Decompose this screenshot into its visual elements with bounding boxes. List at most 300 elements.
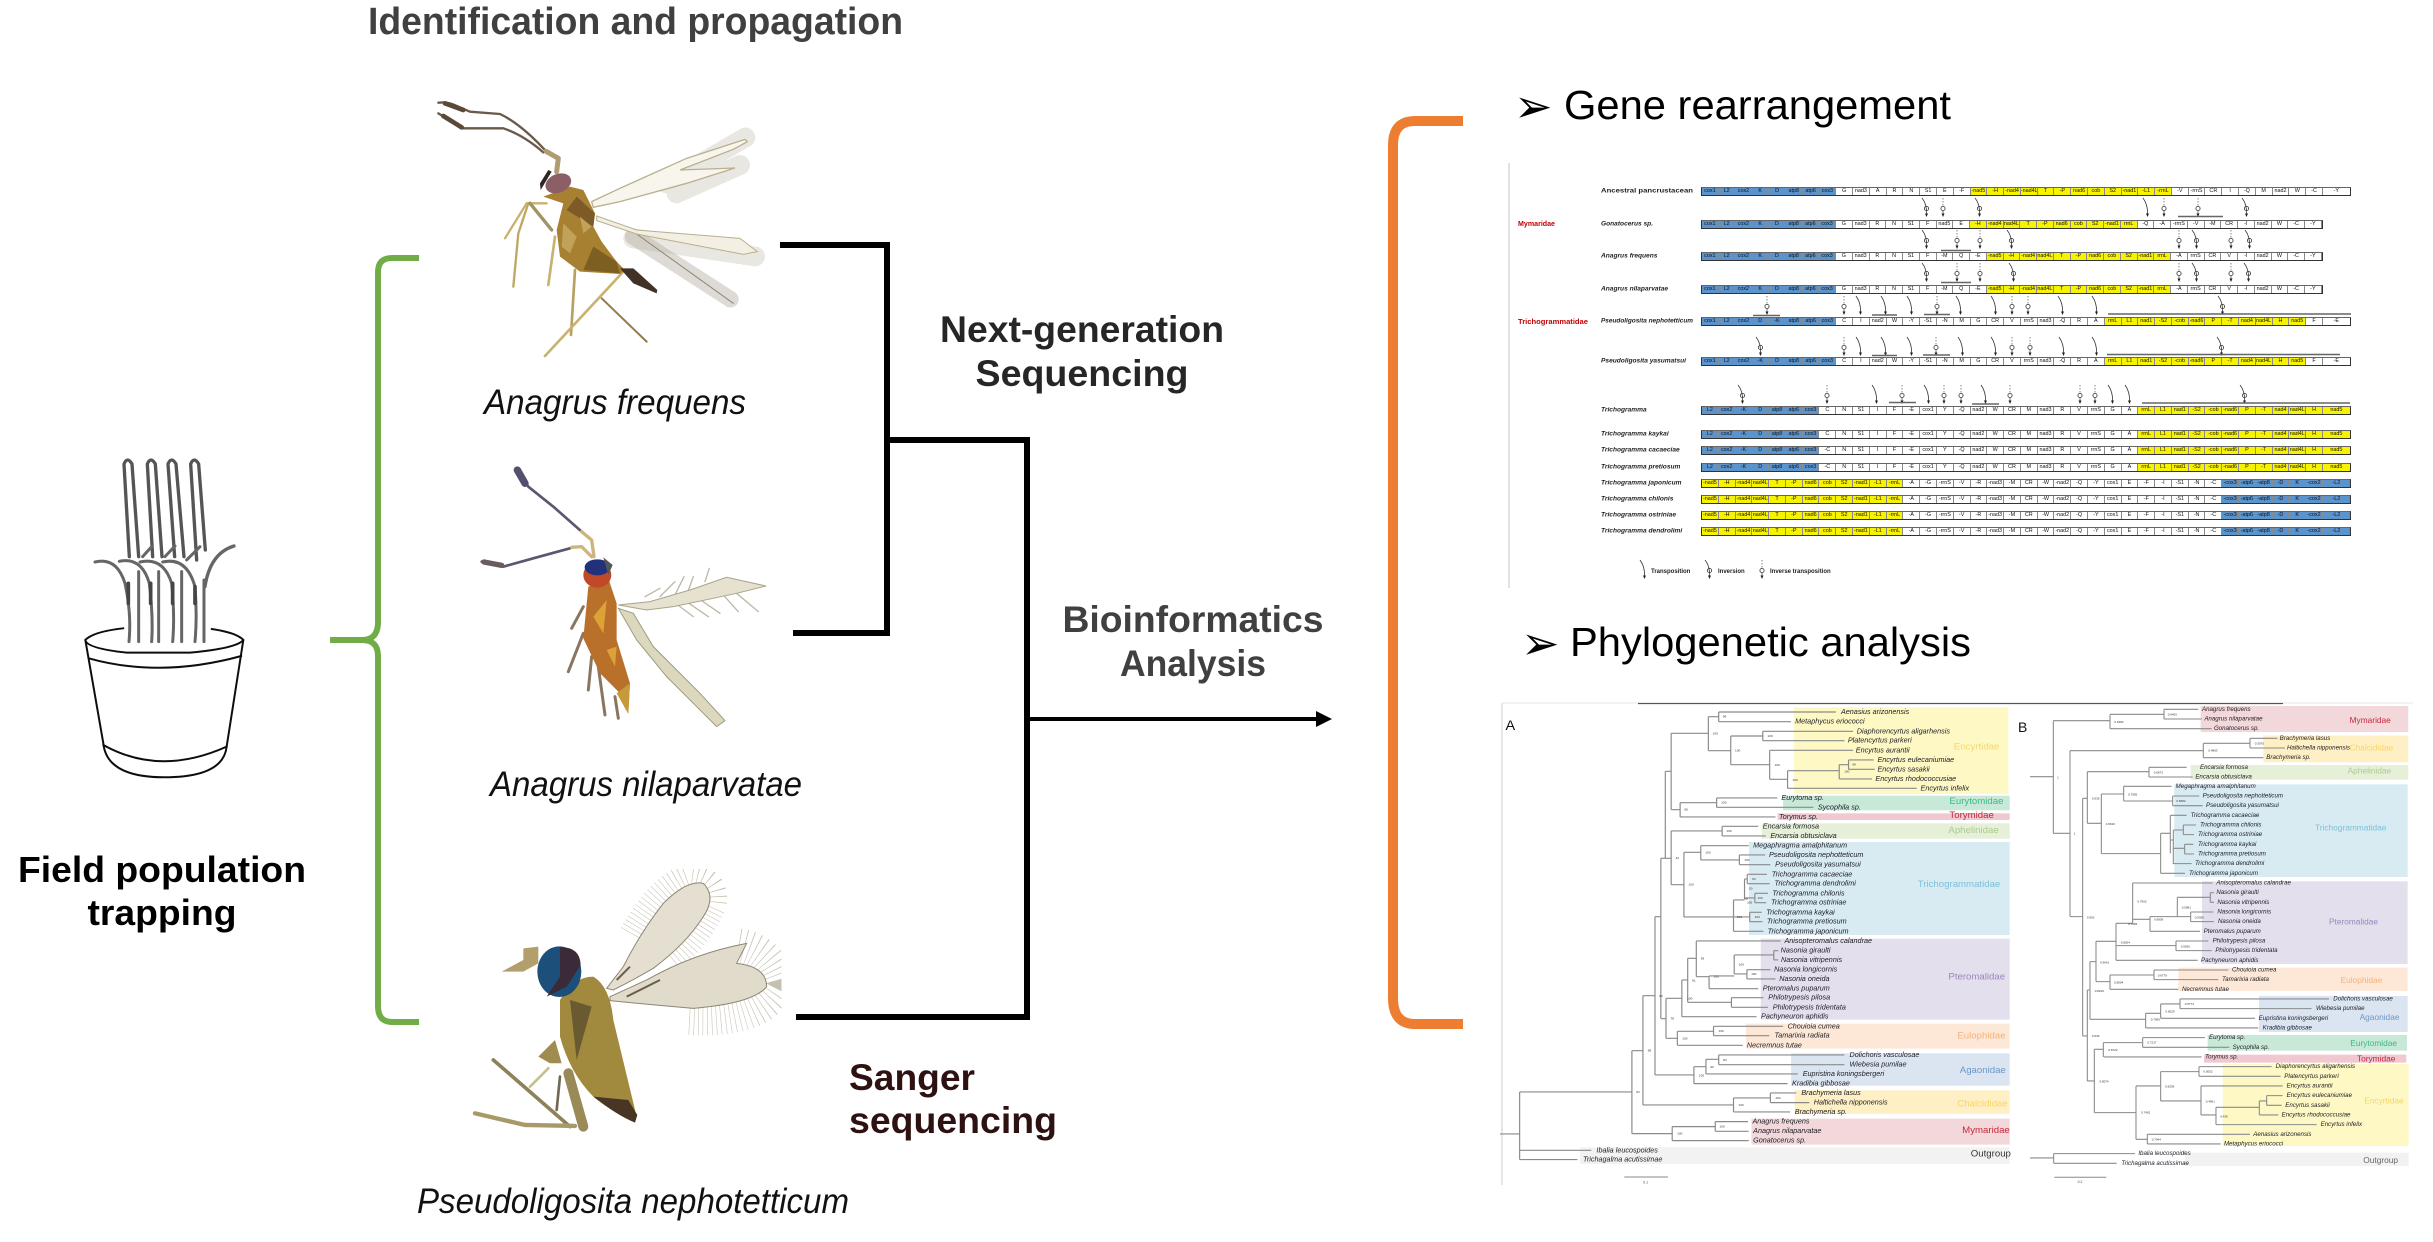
gene row: Trichogramma kaykai: L1 <box>2160 431 2166 437</box>
gene chart family labels <box>1518 221 1588 326</box>
gene row: Pseudoligosita nephotetticum: -N <box>1942 318 1948 324</box>
gene row: Trichogramma kaykai: rrnL <box>2141 431 2151 437</box>
gene row: Trichogramma japonicum: -Y <box>2093 480 2099 486</box>
gene row: Anagrus frequens: nad2 <box>2257 253 2269 259</box>
green bracket <box>330 258 419 1022</box>
node support values A: 99 <box>1852 762 1856 766</box>
gene row: Trichogramma chilonis: -cox3 <box>2224 496 2237 502</box>
species labels A: Pseudoligosita nephotteticum <box>1769 851 1863 859</box>
gene chart species labels: Trichogramma cacaeciae <box>1601 446 1680 454</box>
gene row: ancestral pancrustacean: I <box>2229 188 2231 194</box>
gene row: Trichogramma kaykai: nad4 <box>2274 431 2286 437</box>
gene row: Gonatocerus sp.: K <box>1758 221 1762 227</box>
gene row: Trichogramma cacaeciae: -S2 <box>2192 447 2201 453</box>
gene row: Trichogramma kaykai: nad4L <box>2290 431 2305 437</box>
family labels A: Torymidae <box>1949 810 1994 821</box>
node support values B: 0.7044 <box>2152 1137 2161 1141</box>
gene row: Pseudoligosita yasumatsui: -E <box>2334 358 2339 364</box>
gene row: Trichogramma pretiosum: rrnL <box>2141 464 2151 470</box>
gene row: Trichogramma dendrolimi: -cox3 <box>2224 528 2237 534</box>
gene row: Trichogramma dendrolimi: -N <box>2194 528 2199 534</box>
species labels B: Philotrypesis pilosa <box>2213 937 2266 944</box>
gene row: Trichogramma chilonis: -N <box>2194 496 2199 502</box>
species labels A: Chouioia cumea <box>1788 1022 1840 1030</box>
species labels B: Necremnus tutae <box>2182 986 2229 993</box>
gene row: ancestral pancrustacean: -nad4L <box>2021 188 2038 194</box>
gene row: Pseudoligosita nephotetticum: rrnS <box>2024 318 2034 324</box>
label: next-generation sequencing: Sequencing <box>976 353 1188 394</box>
gene row: Trichogramma kaykai: -E <box>1909 431 1914 437</box>
node support values A: 78 <box>1670 1017 1674 1021</box>
gene row: Trichogramma kaykai: V <box>2077 431 2081 437</box>
gene row: Pseudoligosita nephotetticum: CR <box>1991 318 1999 324</box>
species labels B: Sycophila sp. <box>2233 1044 2269 1051</box>
icon: potted plant trap <box>85 460 243 777</box>
species labels A: Nasonia vitripennis <box>1781 956 1843 964</box>
gene row: Anagrus nilaparvatae: cox3 <box>1821 286 1833 292</box>
node support values A: 100 <box>1682 1036 1688 1040</box>
gene row: Trichogramma ostriniae: T <box>1775 512 1779 518</box>
gene row: Anagrus nilaparvatae: F <box>1926 286 1929 292</box>
gene row: Trichogramma pretiosum: nad3 <box>2040 464 2052 470</box>
gene row: Trichogramma japonicum: -atp6 <box>2241 480 2253 486</box>
gene row: Pseudoligosita nephotetticum: G <box>1976 318 1980 324</box>
family labels A: Pteromalidae <box>1948 972 2005 982</box>
heading: phylogenetic analysis: ➢ <box>1521 616 1560 670</box>
gene row: Trichogramma kaykai: Y <box>1943 431 1947 437</box>
insect photo: Anagrus frequens <box>438 102 757 356</box>
species labels B: Trichogramma chilonis <box>2200 821 2261 828</box>
gene row: Trichogramma ostriniae: -nad1 <box>1854 512 1868 518</box>
gene row: ancestral pancrustacean: -nad4 <box>2005 188 2019 194</box>
gene row: Trichogramma japonicum: -D <box>2278 480 2283 486</box>
node support values B: 0.5356 <box>2195 915 2204 919</box>
gene row: Gonatocerus sp.: nad5 <box>1938 221 1950 227</box>
gene row: Gonatocerus sp.: -V <box>2193 221 2198 227</box>
gene row: Trichogramma ostriniae: -nad5 <box>1703 512 1717 518</box>
gene row: Trichogramma dendrolimi: -atp8 <box>2258 528 2270 534</box>
node support values A: 100 <box>1719 1029 1724 1033</box>
node support values A: 100 <box>1793 778 1798 782</box>
gene row: Trichogramma chilonis: -rrnS <box>1939 496 1951 502</box>
gene row: Trichogramma pretiosum: V <box>2077 464 2081 470</box>
species labels A: Brachymeria lasus <box>1801 1089 1861 1097</box>
gene row: Gonatocerus sp.: -Q <box>2142 221 2148 227</box>
gene row: Trichogramma japonicum: -F <box>2144 480 2149 486</box>
species labels A: Kradibia gibbosae <box>1792 1080 1850 1088</box>
gene row: Anagrus frequens: V <box>2227 253 2231 259</box>
gene row: Pseudoligosita nephotetticum: atp6 <box>1805 318 1816 324</box>
gene row: Pseudoligosita nephotetticum: -T <box>2228 318 2233 324</box>
gene row: Trichogramma ostriniae: -F <box>2144 512 2149 518</box>
gene row: Pseudoligosita yasumatsui: atp8 <box>1789 358 1799 364</box>
gene row: Trichogramma pretiosum: -E <box>1909 464 1914 470</box>
species labels A: Platencyrtus parkeri <box>1848 737 1912 745</box>
gene row: Trichogramma japonicum: -cox2 <box>2307 480 2321 486</box>
gene row: Gonatocerus sp.: N <box>1892 221 1896 227</box>
gene row: Trichogramma pretiosum: -C <box>1824 464 1830 470</box>
gene row: Pseudoligosita nephotetticum: nad2 <box>1872 318 1884 324</box>
gene row: Trichogramma chilonis <box>1701 495 2351 504</box>
gene row: Gonatocerus sp.: nad4L <box>2004 221 2019 227</box>
gene row: Trichogramma chilonis: -nad1 <box>1854 496 1868 502</box>
species labels B: Trichogramma dendrolimi <box>2195 860 2265 867</box>
gene row: Anagrus nilaparvatae: -A <box>2176 286 2182 292</box>
gene row: Trichogramma pretiosum <box>1701 463 2351 472</box>
gene row: Trichogramma kaykai: atp8 <box>1772 431 1782 437</box>
gene row: Gonatocerus sp.: E <box>1959 221 1963 227</box>
gene row: Trichogramma japonicum: cox1 <box>2107 480 2118 486</box>
gene row: Gonatocerus sp.: atp6 <box>1805 221 1816 227</box>
family labels B: Mymaridae <box>2350 715 2391 725</box>
gene row: ancestral pancrustacean: G <box>1842 188 1846 194</box>
family shading B <box>2174 706 2409 1166</box>
gene row: Pseudoligosita yasumatsui: -S2 <box>2159 358 2167 364</box>
species labels A: Dolichoris vasculosae <box>1850 1051 1919 1059</box>
gene row: Trichogramma: R <box>2060 407 2064 413</box>
gene row: Pseudoligosita yasumatsui: nad4L <box>2256 358 2271 364</box>
gene row: ancestral pancrustacean: -L1 <box>2142 188 2150 194</box>
gene row: Trichogramma dendrolimi: nad4L <box>1753 528 1768 534</box>
gene row: Trichogramma dendrolimi: E <box>2128 528 2131 534</box>
heading: field population trapping: trapping <box>88 892 236 933</box>
gene row: ancestral pancrustacean: cox2 <box>1738 188 1749 194</box>
heading: phylogenetic analysis: Phylogenetic analysis <box>1570 619 1971 665</box>
gene row: Trichogramma dendrolimi: -R <box>1976 528 1981 534</box>
gene row: Trichogramma: -nad6 <box>2223 407 2237 413</box>
gene row: Trichogramma: P <box>2245 407 2249 413</box>
gene row: Trichogramma ostriniae: CR <box>2025 512 2033 518</box>
gene row: Trichogramma cacaeciae: -K <box>1741 447 1746 453</box>
gene row: ancestral pancrustacean: T <box>2044 188 2047 194</box>
gene row: ancestral pancrustacean: D <box>1775 188 1779 194</box>
gene row: Trichogramma kaykai: I <box>1877 431 1878 437</box>
gene row: Pseudoligosita yasumatsui: -cob <box>2175 358 2185 364</box>
gene row: Trichogramma chilonis: -I <box>2161 496 2165 502</box>
gene row: Trichogramma cacaeciae: R <box>2060 447 2064 453</box>
scale bar A <box>1624 1177 1668 1184</box>
gene row: Anagrus nilaparvatae: -Y <box>2310 286 2316 292</box>
gene row: Gonatocerus sp.: CR <box>2225 221 2233 227</box>
gene row: Trichogramma chilonis: -V <box>1959 496 1964 502</box>
gene row: Trichogramma chilonis: K <box>2295 496 2299 502</box>
gene chart species labels: Trichogramma chilonis <box>1601 496 1674 502</box>
insect photo: Pseudoligosita nephotetticum <box>475 882 767 1127</box>
gene row: Trichogramma cacaeciae: rrnL <box>2141 447 2151 453</box>
panel: phylogenetic tree A <box>1500 707 2011 1184</box>
gene row: Trichogramma cacaeciae: nad4 <box>2274 447 2286 453</box>
gene row: Gonatocerus sp. <box>1701 220 2323 229</box>
gene row: Trichogramma japonicum: nad4L <box>1753 480 1768 486</box>
gene row: ancestral pancrustacean: -Y <box>2334 188 2339 194</box>
gene row: Trichogramma pretiosum: cox1 <box>1922 464 1934 470</box>
gene row: Pseudoligosita nephotetticum: L1 <box>2126 318 2132 324</box>
gene row: Trichogramma japonicum: -H <box>1724 480 1730 486</box>
node support values B: 0.8246 <box>2095 989 2104 993</box>
gene row: Pseudoligosita nephotetticum: rrnL <box>2108 318 2117 324</box>
species labels B: Encarsia obtusiclava <box>2195 773 2252 780</box>
gene row: Pseudoligosita yasumatsui: G <box>1976 358 1980 364</box>
gene row: Trichogramma dendrolimi: -nad2 <box>2055 528 2069 534</box>
gene row: ancestral pancrustacean: cox1 <box>1704 188 1716 194</box>
node support values A: 93 <box>1752 877 1756 881</box>
gene row: Pseudoligosita yasumatsui: nad3 <box>2040 358 2052 364</box>
species labels B <box>2121 706 2393 1167</box>
gene row: Trichogramma cacaeciae: -nad6 <box>2223 447 2237 453</box>
gene row: Trichogramma chilonis: -cox2 <box>2307 496 2321 502</box>
scale bar A: 0.1 <box>1643 1180 1648 1184</box>
gene row: ancestral pancrustacean: nad2 <box>2274 188 2286 194</box>
species labels B: Chouioia cumea <box>2232 966 2277 973</box>
gene row: Pseudoligosita nephotetticum: C <box>1842 318 1846 324</box>
heading: field population trapping <box>18 849 306 933</box>
gene row: Gonatocerus sp.: -nad4 <box>1988 221 2002 227</box>
species labels A: Trichogramma japonicum <box>1768 927 1849 935</box>
gene row: Anagrus nilaparvatae: S1 <box>1908 286 1914 292</box>
gene row: Anagrus frequens: rrnS <box>2191 253 2201 259</box>
node support values B: 0.439 <box>2220 1114 2228 1118</box>
gene row: Trichogramma dendrolimi: -Q <box>2076 528 2082 534</box>
label: bioinformatics analysis <box>1062 599 1324 684</box>
caption: Pseudoligosita nephotetticum: Pseudoligosita nephotetticum <box>417 1182 849 1221</box>
gene row: Trichogramma ostriniae: K <box>2295 512 2299 518</box>
species labels B: Torymus sp. <box>2205 1053 2238 1060</box>
gene row: Trichogramma ostriniae: -W <box>2042 512 2049 518</box>
species labels B: Ibalia leucospoides <box>2138 1150 2191 1157</box>
gene row: Pseudoligosita nephotetticum: R <box>2077 318 2081 324</box>
gene row: Pseudoligosita nephotetticum: A <box>2094 318 2098 324</box>
gene row: Trichogramma kaykai: -Q <box>1959 431 1965 437</box>
gene row: Trichogramma japonicum: -L1 <box>1874 480 1882 486</box>
gene row: Anagrus nilaparvatae: -C <box>2293 286 2299 292</box>
gene row: Trichogramma: nad4 <box>2274 407 2286 413</box>
gene row: Trichogramma ostriniae: -cox3 <box>2224 512 2237 518</box>
gene row: Trichogramma: -E <box>1909 407 1914 413</box>
label: bioinformatics analysis: Analysis <box>1120 643 1266 684</box>
gene row: Trichogramma pretiosum: F <box>1893 464 1896 470</box>
gene rearrangement event markers <box>1738 198 2351 404</box>
species labels B: Trichagalma acutissimae <box>2121 1160 2190 1167</box>
family labels A: Chalcididae <box>1957 1099 2008 1109</box>
gene row: Pseudoligosita yasumatsui: L1 <box>2126 358 2132 364</box>
gene row: Trichogramma pretiosum: -T <box>2261 464 2266 470</box>
gene row: Trichogramma: -Q <box>1959 407 1965 413</box>
gene row: ancestral pancrustacean: -rrnL <box>2157 188 2169 194</box>
gene row: Anagrus frequens: Q <box>1959 253 1963 259</box>
gene row: Pseudoligosita yasumatsui: L2 <box>1724 358 1730 364</box>
species labels A: Encyrtus eulecaniumiae <box>1877 756 1954 764</box>
gene row: Pseudoligosita nephotetticum: cox1 <box>1704 318 1716 324</box>
gene row: ancestral pancrustacean: -P <box>2060 188 2065 194</box>
species labels A: Brachymeria sp. <box>1795 1108 1847 1116</box>
gene row: Pseudoligosita yasumatsui: D <box>1775 358 1779 364</box>
node support values B: 0.8204 <box>2121 940 2130 944</box>
node support values A: 100 <box>1714 974 1719 978</box>
species labels B: Pseudoligosita nephotteticum <box>2203 792 2283 799</box>
gene row: Trichogramma cacaeciae: A <box>2128 447 2131 453</box>
gene row: Gonatocerus sp.: -I <box>2244 221 2248 227</box>
node support values B: 0.6529 <box>2165 1009 2175 1013</box>
gene row: Trichogramma dendrolimi: -nad5 <box>1703 528 1717 534</box>
gene row: Trichogramma: rrnS <box>2091 407 2101 413</box>
gene row: Trichogramma dendrolimi: CR <box>2025 528 2033 534</box>
node support values B: 0.5926 <box>2181 944 2190 948</box>
species labels B: Tamarixia radiata <box>2222 976 2270 983</box>
species labels B: Nasonia longicornis <box>2217 908 2271 915</box>
gene row: Pseudoligosita nephotetticum: V <box>2010 318 2014 324</box>
gene row: Trichogramma ostriniae: cob <box>1823 512 1832 518</box>
gene row: Anagrus nilaparvatae: rrnS <box>2191 286 2201 292</box>
gene row: ancestral pancrustacean: nad3 <box>1855 188 1867 194</box>
gene row: Pseudoligosita nephotetticum: H <box>2278 318 2282 324</box>
gene row: Anagrus nilaparvatae: Q <box>1959 286 1963 292</box>
gene chart legend <box>1640 560 1831 579</box>
gene row: Pseudoligosita nephotetticum: -Y <box>1909 318 1914 324</box>
node support values A: 100 <box>1687 997 1693 1001</box>
gene row: Anagrus frequens: atp8 <box>1788 253 1799 259</box>
gene row: Trichogramma dendrolimi: -rrnL <box>1889 528 1900 534</box>
species labels B: Brachymeria lasus <box>2280 735 2330 742</box>
heading: gene rearrangement: Gene rearrangement <box>1564 82 1952 128</box>
gene row: ancestral pancrustacean: -nad5 <box>1971 188 1985 194</box>
gene row: Trichogramma pretiosum: rrnS <box>2091 464 2101 470</box>
species labels A: Tamarixia radiata <box>1774 1032 1830 1040</box>
gene row: Trichogramma pretiosum: A <box>2128 464 2131 470</box>
species labels B: Encyrtus eulecaniumiae <box>2287 1092 2353 1099</box>
gene row: Trichogramma cacaeciae: W <box>1993 447 1998 453</box>
species labels B: Gonatocerus sp. <box>2214 725 2259 732</box>
species labels B: Trichogramma japonicum <box>2189 870 2258 877</box>
label: sanger sequencing: sequencing <box>849 1100 1057 1141</box>
gene row: Trichogramma cacaeciae: atp8 <box>1772 447 1782 453</box>
gene row: Trichogramma kaykai: A <box>2128 431 2131 437</box>
gene row: Trichogramma dendrolimi: -rrnS <box>1939 528 1951 534</box>
gene row: Trichogramma ostriniae: nad4L <box>1753 512 1768 518</box>
node support values B: 0.6582 <box>2176 799 2186 803</box>
gene row: Anagrus frequens: -H <box>2009 253 2014 259</box>
gene row: Trichogramma: nad4L <box>2290 407 2305 413</box>
node support values B: 0.6405 <box>2168 713 2177 717</box>
gene row: Trichogramma chilonis: cob <box>1823 496 1832 502</box>
gene row: Trichogramma pretiosum: M <box>2026 464 2031 470</box>
species labels A: Nasonia giraulti <box>1781 947 1831 955</box>
gene chart family labels: Trichogrammatidae <box>1518 319 1588 326</box>
gene row: Anagrus nilaparvatae: N <box>1892 286 1896 292</box>
gene row: Pseudoligosita nephotetticum: L2 <box>1724 318 1730 324</box>
family labels A: Eulophidae <box>1957 1031 2006 1041</box>
family labels A: Trichogrammatidae <box>1918 879 2000 890</box>
species labels A: Nasonia oneida <box>1779 975 1830 983</box>
gene row: Trichogramma japonicum: -P <box>1791 480 1796 486</box>
gene row: Pseudoligosita nephotetticum: -cob <box>2175 318 2185 324</box>
species labels A: Gonatocerus sp. <box>1753 1137 1806 1145</box>
node support values A: 89 <box>1648 1049 1652 1053</box>
gene row: Pseudoligosita yasumatsui: F <box>2312 358 2316 364</box>
node support values A: 100 <box>1739 962 1744 966</box>
gene row: Trichogramma kaykai: nad2 <box>1972 431 1984 437</box>
gene row: Trichogramma kaykai: L2 <box>1707 431 1713 437</box>
species labels B: Wiebesia pumilae <box>2316 1005 2365 1012</box>
gene row: Trichogramma: A <box>2128 407 2131 413</box>
heading: field population trapping: Field population <box>18 849 306 890</box>
family labels A: Mymaridae <box>1962 1125 2010 1136</box>
node support values B: 0.6673 <box>2154 770 2163 774</box>
gene row: Trichogramma pretiosum: W <box>1993 464 1998 470</box>
species labels A: Diaphorencyrtus aligarhensis <box>1857 727 1950 735</box>
gene row: Anagrus frequens: S1 <box>1908 253 1914 259</box>
gene row: Trichogramma: D <box>1758 407 1762 413</box>
gene row: Trichogramma japonicum: -nad5 <box>1703 480 1717 486</box>
gene row: Gonatocerus sp.: S2 <box>2092 221 2098 227</box>
gene row: Trichogramma kaykai: -nad6 <box>2223 431 2237 437</box>
gene row: ancestral pancrustacean: L2 <box>1724 188 1730 194</box>
orange bracket <box>1393 121 1463 1024</box>
gene row: Pseudoligosita yasumatsui: rrnS <box>2024 358 2034 364</box>
gene row: Trichogramma japonicum: -G <box>1925 480 1931 486</box>
gene row: Trichogramma chilonis: E <box>2128 496 2131 502</box>
gene row: ancestral pancrustacean: CR <box>2209 188 2217 194</box>
gene row: Pseudoligosita nephotetticum: nad3 <box>2040 318 2052 324</box>
species labels A <box>1583 708 1970 1164</box>
gene row: Anagrus frequens: D <box>1775 253 1779 259</box>
species labels B: Philotrypesis tridentata <box>2215 947 2278 954</box>
gene row: Pseudoligosita nephotetticum: W <box>1892 318 1897 324</box>
gene row: Trichogramma dendrolimi: -W <box>2042 528 2049 534</box>
caption: Anagrus nilaparvatae: Anagrus nilaparvatae <box>488 765 802 804</box>
gene row: Trichogramma: CR <box>2008 407 2016 413</box>
gene row: Trichogramma pretiosum: L1 <box>2160 464 2166 470</box>
gene row: Pseudoligosita yasumatsui: R <box>2077 358 2081 364</box>
gene row: Trichogramma ostriniae: -I <box>2161 512 2165 518</box>
gene row: Trichogramma japonicum: -M <box>2009 480 2015 486</box>
gene row: Anagrus nilaparvatae: -nad1 <box>2138 286 2152 292</box>
gene row: Trichogramma cacaeciae: nad1 <box>2174 447 2186 453</box>
gene row: Trichogramma chilonis: T <box>1775 496 1779 502</box>
gene row: Pseudoligosita yasumatsui: atp6 <box>1805 358 1816 364</box>
gene row: Pseudoligosita nephotetticum: nad4L <box>2256 318 2271 324</box>
gene row: Trichogramma dendrolimi: T <box>1775 528 1779 534</box>
gene row: Trichogramma japonicum: -N <box>2194 480 2199 486</box>
gene row: Gonatocerus sp.: -nad1 <box>2105 221 2119 227</box>
node support values A: 100 <box>1775 763 1780 767</box>
gene row: Gonatocerus sp.: -H <box>1975 221 1981 227</box>
gene row: Anagrus frequens: T <box>2060 253 2063 259</box>
node support values B: 0.5774 <box>2185 1002 2194 1006</box>
gene row: Trichogramma cacaeciae: nad3 <box>2040 447 2052 453</box>
gene row: Trichogramma japonicum: E <box>2128 480 2131 486</box>
gene row: Gonatocerus sp.: R <box>1875 221 1879 227</box>
node support values B: 0.7955 <box>2128 792 2138 796</box>
gene row: Trichogramma cacaeciae <box>1701 446 2351 455</box>
gene row: Pseudoligosita nephotetticum: M <box>1959 318 1964 324</box>
gene row: Trichogramma japonicum: -cox3 <box>2224 480 2237 486</box>
gene chart species labels: Ancestral pancrustacean <box>1601 188 1693 194</box>
gene row: Trichogramma dendrolimi: S2 <box>1841 528 1847 534</box>
species labels A: Ibalia leucospoides <box>1596 1146 1658 1154</box>
gene chart legend: Inversion <box>1718 569 1745 575</box>
gene row: Gonatocerus sp.: W <box>2277 221 2282 227</box>
gene row: Trichogramma cacaeciae: nad5 <box>2330 447 2342 453</box>
family labels B: Agaonidae <box>2360 1012 2400 1022</box>
family labels A <box>1918 742 2011 1160</box>
gene row: Trichogramma: C <box>1825 407 1829 413</box>
gene row: Anagrus nilaparvatae: V <box>2227 286 2231 292</box>
node support values A: 100 <box>1744 858 1750 862</box>
gene row: Trichogramma cacaeciae: cox3 <box>1805 447 1816 453</box>
gene row: Pseudoligosita yasumatsui: A <box>2094 358 2098 364</box>
gene row: Anagrus frequens: R <box>1875 253 1879 259</box>
gene row: Trichogramma pretiosum: N <box>1842 464 1846 470</box>
